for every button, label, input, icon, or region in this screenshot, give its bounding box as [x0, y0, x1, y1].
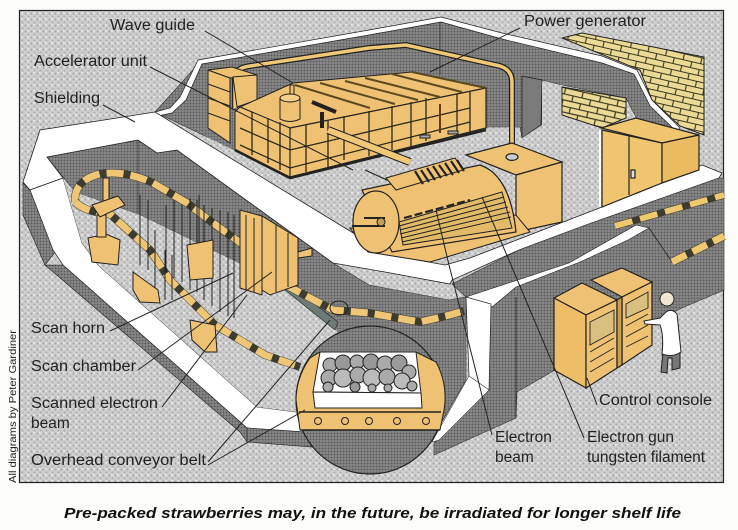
lower room floor [63, 178, 338, 412]
leader lines [103, 28, 597, 465]
label: scanned electron beam: beam [31, 415, 70, 432]
shielding: main white band [23, 112, 722, 284]
right dark wall and console room wall [432, 178, 724, 455]
magnified strawberries inset [296, 326, 445, 474]
label: scan horn: Scan horn [31, 320, 105, 337]
control console [554, 268, 652, 388]
back wall of accelerator room [155, 20, 679, 190]
power generator box [466, 143, 562, 232]
caption: Pre-packed strawberries may, in the future, be irradiated for longer shelf life [64, 505, 681, 522]
brick wall small [562, 87, 626, 128]
electron beam rod to tank [328, 130, 420, 195]
accelerator room floor [205, 82, 602, 262]
scan horn and yellow chamber blocks [88, 178, 312, 352]
control cabinet in accelerator room [600, 118, 699, 207]
tank cooling fins [386, 158, 464, 190]
electron gun tank [350, 165, 530, 262]
label: scanned electron beam: Scanned electron [31, 395, 158, 412]
conveyor on right side [615, 195, 724, 262]
brick wall large [562, 33, 704, 135]
overhead conveyor belt [75, 173, 464, 367]
label: wave guide: Wave guide [110, 17, 195, 34]
strawberries [321, 354, 417, 392]
label: accelerator unit: Accelerator unit [34, 53, 148, 70]
label: scanned electron beam [31, 395, 158, 432]
label: electron beam: beam [495, 449, 534, 466]
label: electron gun tungsten filament: tungsten filament [587, 449, 706, 466]
label: power generator: Power generator [524, 13, 646, 30]
label: control console: Control console [599, 392, 712, 409]
wave guide pipe [235, 45, 518, 160]
scan chamber vertical bars [140, 195, 234, 318]
accelerator cylinder and valve [280, 85, 336, 128]
lower room back wall [47, 140, 466, 425]
shielding: top white band [155, 17, 680, 132]
label: electron beam: Electron [495, 429, 552, 446]
label: overhead conveyor belt: Overhead conveyor belt [31, 452, 207, 469]
labels [31, 13, 712, 469]
white tray [313, 352, 422, 408]
label: electron gun tungsten filament: Electron gun [587, 429, 674, 446]
shielding: lower left white band [23, 178, 312, 447]
belt rails and wheels [299, 412, 441, 430]
technician figure [644, 292, 681, 373]
label: scan chamber: Scan chamber [31, 358, 136, 375]
yellow conveyor in inset [296, 352, 445, 430]
label: shielding: Shielding [34, 90, 100, 107]
accelerator unit [208, 67, 486, 178]
credit: All diagrams by Peter Gardiner [7, 329, 19, 483]
